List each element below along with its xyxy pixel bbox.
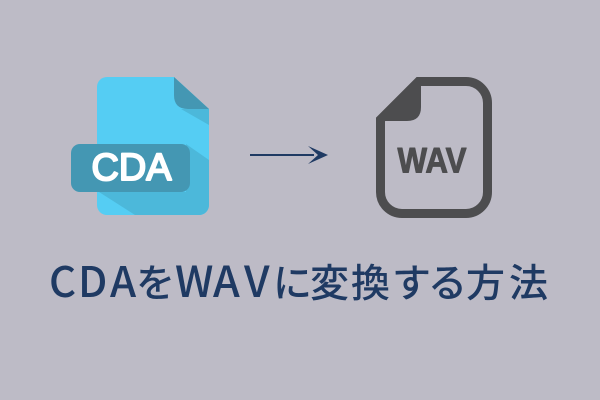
file outline	[380, 82, 488, 214]
arrow	[250, 146, 328, 164]
icon: WAV file	[376, 77, 488, 214]
WAV text: WAV	[398, 142, 467, 180]
file body	[97, 77, 209, 215]
CDA label: CDA	[92, 147, 172, 189]
title: を	[136, 253, 175, 309]
title: WAV	[175, 248, 270, 310]
page fold	[174, 77, 209, 109]
icon: CDA file	[71, 77, 209, 215]
title: CDA	[49, 249, 137, 310]
label shadow	[99, 144, 209, 215]
title: に変換する方法	[273, 253, 548, 309]
fold shadow	[181, 109, 209, 125]
page fold	[376, 77, 421, 121]
